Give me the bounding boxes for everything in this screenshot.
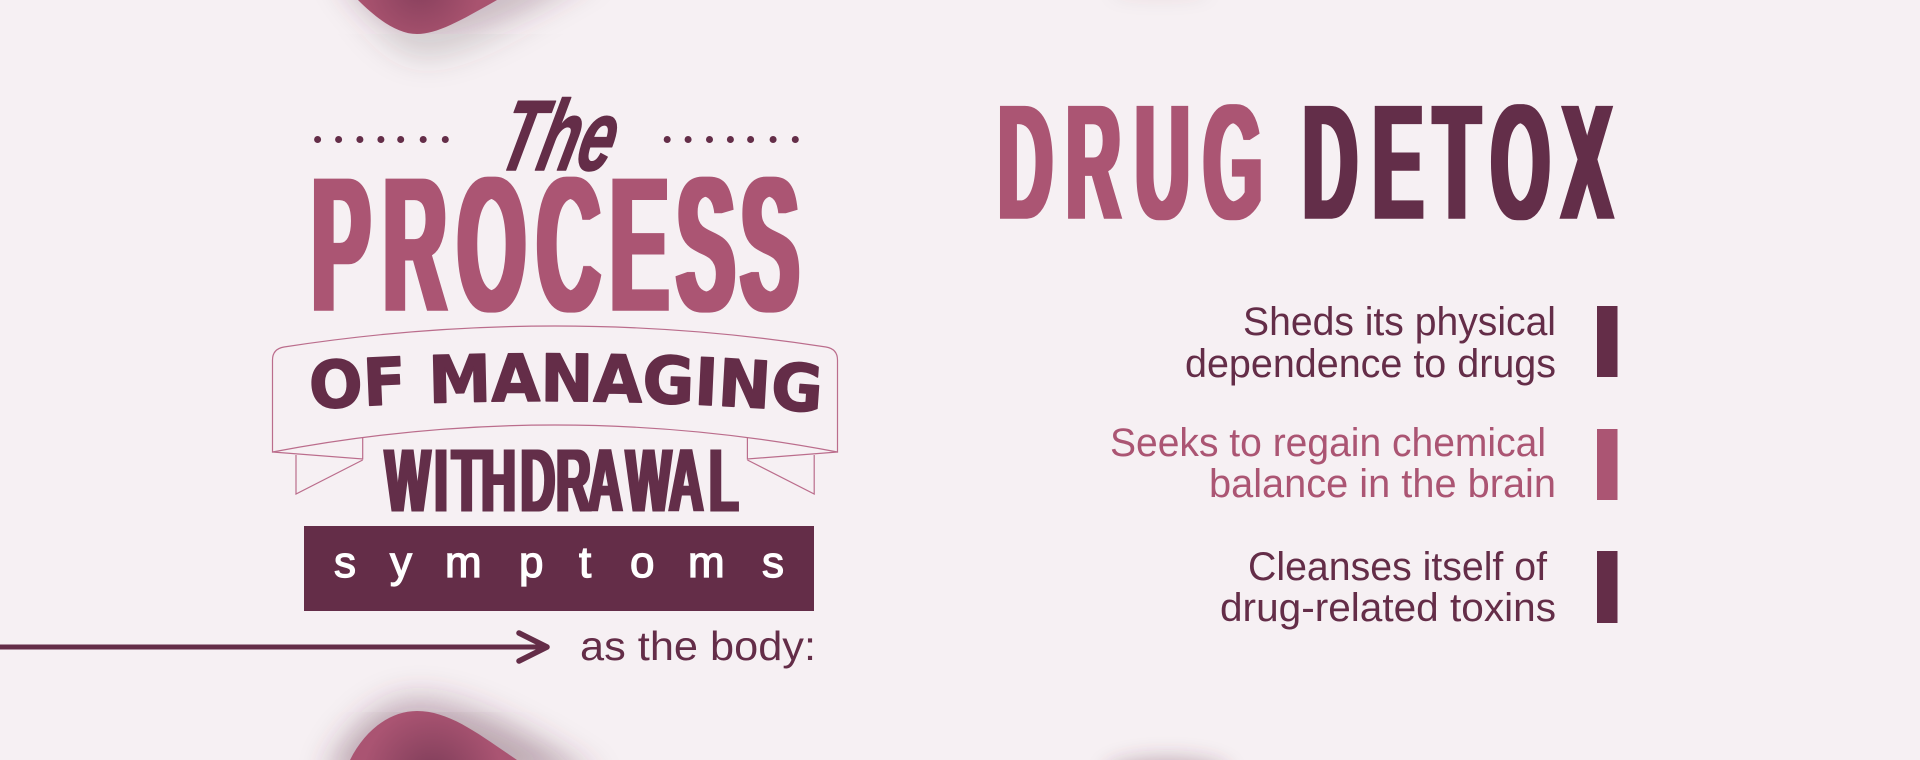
bar: chemical balance xyxy=(1597,429,1618,500)
bar: toxins xyxy=(1597,551,1618,623)
item: physical dependence xyxy=(1185,300,1556,386)
faint shadow bottom centre xyxy=(1105,756,1229,760)
ribbon banner xyxy=(272,326,838,494)
item: toxins xyxy=(1220,545,1556,630)
text: as the body: as the body: xyxy=(580,623,816,669)
bar: physical dependence xyxy=(1597,306,1618,377)
dots right xyxy=(664,136,799,143)
left title lockup xyxy=(0,80,838,669)
right title: DRUG DETOX xyxy=(998,71,1612,255)
bottom blob with shadow xyxy=(325,697,600,760)
heading: PROCESS: PROCESS xyxy=(312,137,799,352)
arrow xyxy=(0,633,547,661)
right title: DRUG DETOX: DETOX xyxy=(1303,71,1612,255)
item: physical dependence: dependence to drugs xyxy=(1185,342,1556,386)
symptoms box xyxy=(304,526,814,611)
item: chemical balance xyxy=(1110,421,1556,506)
symptoms label: symptoms xyxy=(334,538,784,587)
item: physical dependence: Sheds its physical xyxy=(1243,300,1556,344)
heading: OF MANAGING: OF MANAGING xyxy=(311,352,820,412)
item: chemical balance: Seeks to regain chemical xyxy=(1110,421,1546,465)
top blob with shadow xyxy=(335,0,600,58)
heading: WITHDRAWAL: WITHDRAWAL xyxy=(385,432,738,532)
item: toxins: drug-related toxins xyxy=(1220,586,1556,630)
right title: DRUG DETOX: DRUG xyxy=(998,71,1262,255)
item: chemical balance: balance in the brain xyxy=(1209,462,1556,506)
heading: OF MANAGING xyxy=(311,352,820,412)
heading: The: The xyxy=(489,80,631,192)
item: toxins: Cleanses itself of xyxy=(1248,545,1548,589)
dots left xyxy=(314,136,449,143)
